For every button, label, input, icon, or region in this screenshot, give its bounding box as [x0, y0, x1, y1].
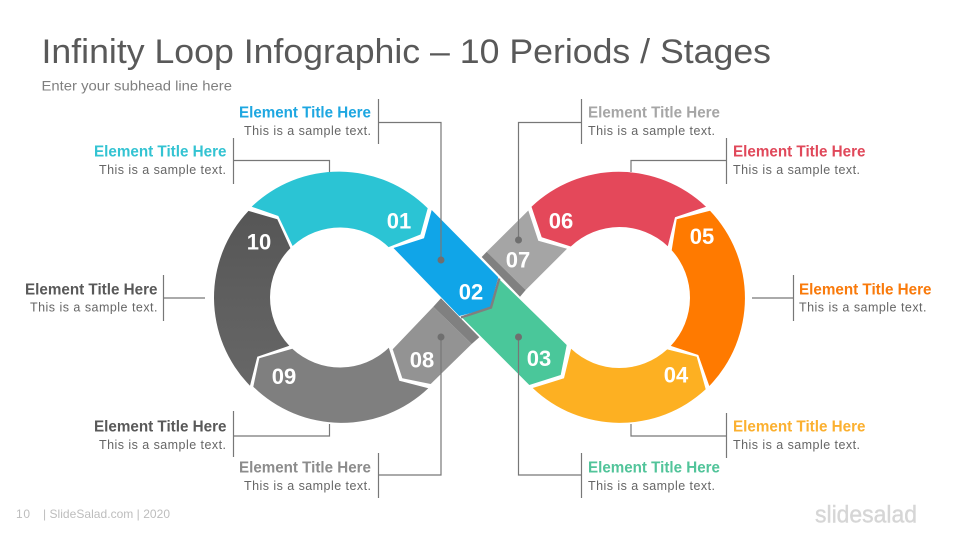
- segment 02: [394, 210, 498, 316]
- segment 06: 06: [549, 208, 573, 233]
- segment 04: [533, 349, 706, 423]
- label 10: This is a sample text.: [30, 301, 158, 315]
- segment 05: [671, 211, 745, 386]
- label 08: [239, 334, 444, 498]
- label 01: This is a sample text.: [99, 163, 226, 177]
- label 09: [94, 411, 330, 457]
- title: Infinity Loop Infographic – 10 Periods / Stages: [42, 33, 771, 71]
- label 03: This is a sample text.: [588, 479, 715, 493]
- segment 06: [532, 172, 706, 246]
- segment 01: [252, 172, 428, 247]
- infinity loop diagram: [214, 172, 745, 423]
- label 04: [631, 413, 866, 458]
- label 05: [752, 275, 932, 321]
- segment 09: 09: [272, 364, 296, 389]
- subhead: Enter your subhead line here: [42, 78, 232, 94]
- label 04: Element Title Here: [733, 419, 866, 436]
- segment 10: 10: [247, 229, 271, 254]
- label 06: Element Title Here: [733, 144, 866, 161]
- segment 01: 01: [387, 208, 411, 234]
- label 01: Element Title Here: [94, 144, 227, 161]
- label 09: Element Title Here: [94, 419, 227, 436]
- label 10: [25, 275, 205, 321]
- label 07: [515, 99, 720, 244]
- label 06: This is a sample text.: [733, 163, 860, 177]
- footer page number: 10: [16, 507, 30, 521]
- logo wordmark: slidesalad: [815, 502, 917, 528]
- label 03: Element Title Here: [588, 460, 720, 477]
- segment 08: [393, 298, 479, 384]
- segment 05: 05: [690, 224, 714, 249]
- segment 07: [482, 210, 567, 297]
- segment 10: [214, 211, 290, 386]
- label 07: Element Title Here: [588, 105, 720, 122]
- label 02: This is a sample text.: [244, 124, 371, 138]
- label 02: Element Title Here: [239, 105, 371, 122]
- label 07: This is a sample text.: [588, 124, 715, 138]
- label 05: This is a sample text.: [799, 301, 926, 315]
- label 05: Element Title Here: [799, 281, 932, 298]
- segment 07: 07: [506, 248, 530, 273]
- label 08: Element Title Here: [239, 460, 371, 477]
- label 01: [94, 138, 330, 184]
- label 02: [239, 99, 444, 264]
- label 10: Element Title Here: [25, 281, 158, 298]
- segment 03: [461, 278, 567, 385]
- label 08: This is a sample text.: [244, 479, 371, 493]
- segment 03: 03: [527, 346, 551, 371]
- segment 08: 08: [410, 347, 434, 372]
- footer source: | SlideSalad.com | 2020: [43, 507, 170, 521]
- segment 04: 04: [664, 363, 689, 388]
- label 03: [515, 334, 720, 498]
- label 06: [631, 138, 866, 184]
- segment 02: 02: [459, 279, 483, 304]
- label 09: This is a sample text.: [99, 438, 226, 452]
- segment 09: [253, 348, 428, 423]
- label 04: This is a sample text.: [733, 438, 860, 452]
